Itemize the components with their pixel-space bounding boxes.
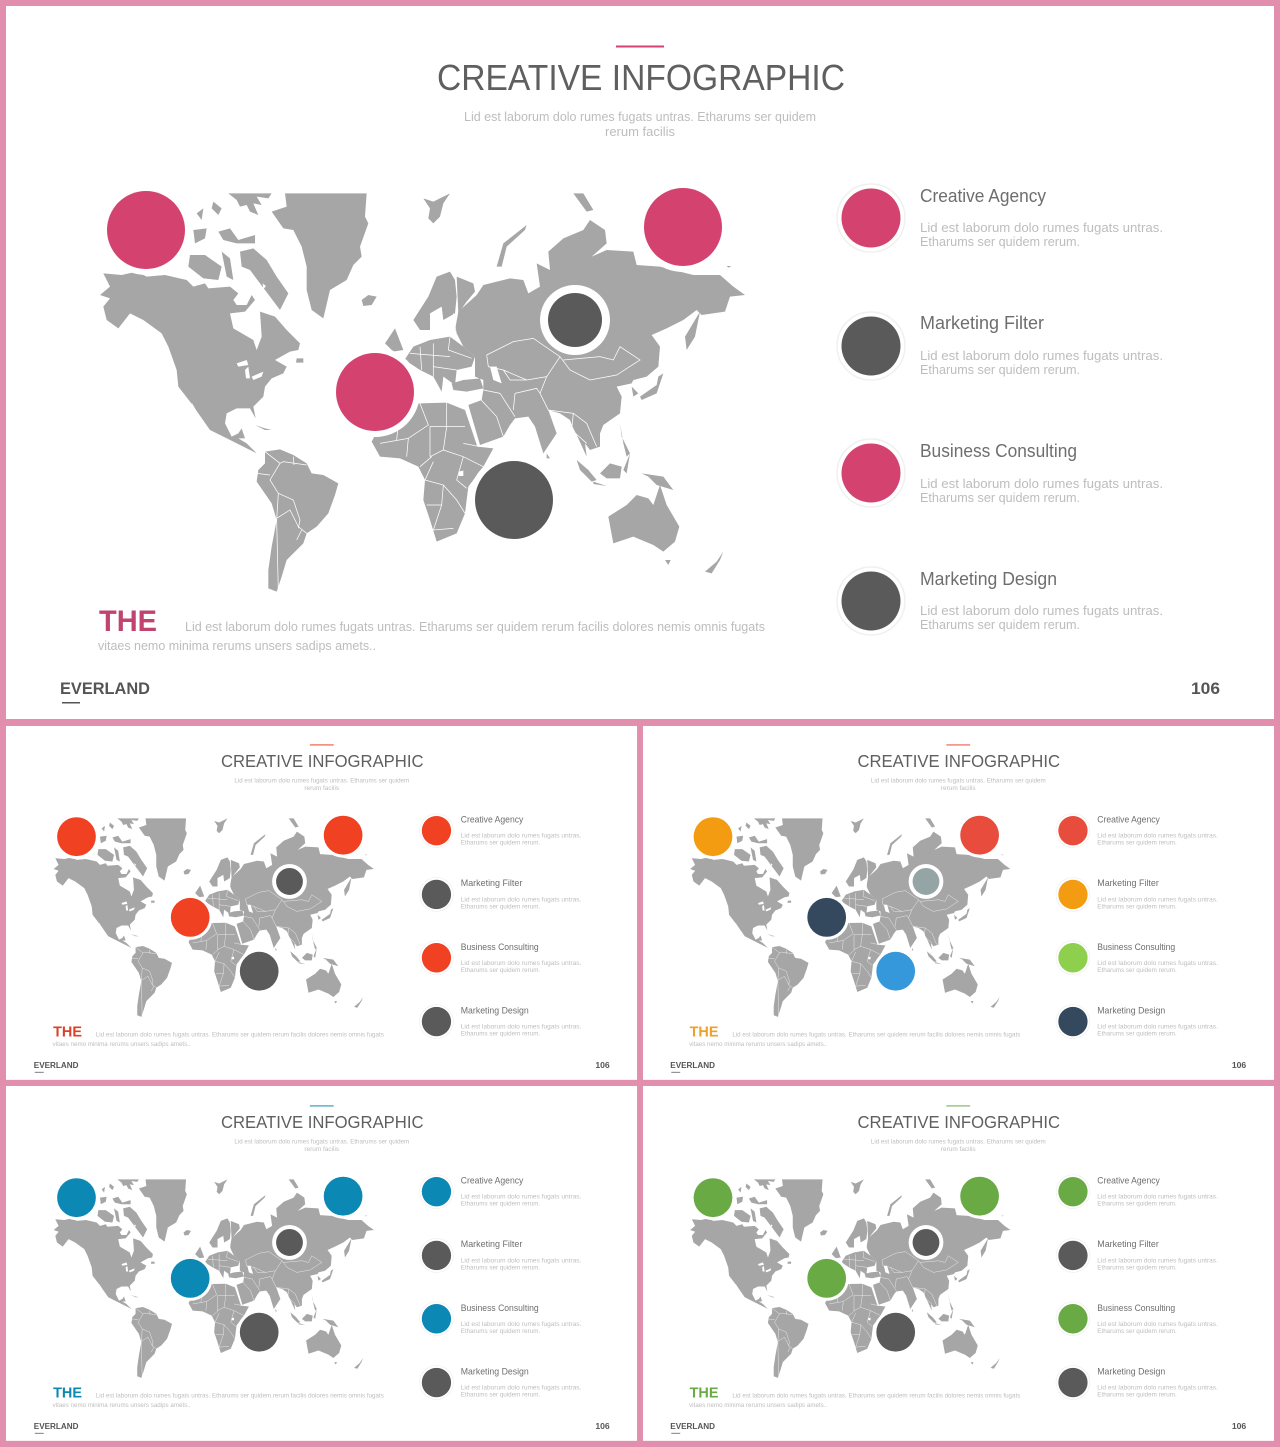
list item: marketing filter: Lid est laborum dolo rumes fugats untras. bbox=[920, 349, 1163, 363]
list item: business consulting: Lid est laborum dolo rumes fugats untras. bbox=[1097, 1321, 1218, 1328]
map marker: indian ocean bbox=[873, 1310, 918, 1355]
list item: business consulting bbox=[420, 1302, 582, 1336]
map marker: north america bbox=[691, 1175, 735, 1220]
subtitle: rerum facilis bbox=[941, 1146, 976, 1153]
subtitle bbox=[234, 777, 409, 792]
list item: creative agency: Lid est laborum dolo rumes fugats untras. bbox=[1097, 833, 1218, 840]
map marker: atlantic bbox=[168, 895, 213, 940]
list item: marketing filter: Marketing Filter bbox=[1097, 1239, 1159, 1249]
list item: business consulting: Lid est laborum dolo rumes fugats untras. bbox=[1097, 960, 1218, 967]
list item: business consulting bbox=[420, 941, 582, 975]
title: CREATIVE INFOGRAPHIC bbox=[857, 1112, 1060, 1132]
map marker: russia centre bbox=[272, 1225, 307, 1260]
map marker: north america bbox=[101, 185, 191, 275]
title: CREATIVE INFOGRAPHIC bbox=[221, 751, 424, 771]
list item: business consulting: Lid est laborum dolo rumes fugats untras. bbox=[920, 477, 1163, 491]
subtitle: Lid est laborum dolo rumes fugats untras. Etharums ser quidem bbox=[234, 777, 409, 784]
subtitle bbox=[871, 777, 1046, 792]
list item: marketing design: Etharums ser quidem rerum. bbox=[920, 618, 1080, 632]
map marker: russia east bbox=[321, 1174, 365, 1219]
world map bbox=[690, 818, 1010, 1017]
note: the bbox=[53, 1023, 384, 1048]
subtitle: Lid est laborum dolo rumes fugats untras. Etharums ser quidem bbox=[464, 110, 816, 124]
slide: green version bbox=[643, 1086, 1274, 1441]
list item: creative agency: Etharums ser quidem rerum. bbox=[461, 840, 540, 847]
map marker: north america bbox=[54, 1175, 99, 1220]
subtitle: Lid est laborum dolo rumes fugats untras. Etharums ser quidem bbox=[871, 1138, 1046, 1145]
note: the: vitaes nemo minima rerums unsers sadips amets.. bbox=[53, 1041, 191, 1048]
map marker: indian ocean bbox=[469, 455, 559, 545]
list item: marketing filter bbox=[420, 1239, 582, 1272]
map marker: north america bbox=[691, 814, 735, 859]
list item: marketing filter: Lid est laborum dolo rumes fugats untras. bbox=[1097, 1257, 1218, 1264]
list item: marketing design: Marketing Design bbox=[461, 1006, 529, 1016]
map marker: atlantic bbox=[330, 347, 420, 437]
map marker: indian ocean bbox=[237, 1310, 282, 1355]
list item: marketing design bbox=[837, 567, 1163, 635]
subtitle: Lid est laborum dolo rumes fugats untras. Etharums ser quidem bbox=[871, 777, 1046, 784]
map marker: russia centre bbox=[540, 285, 610, 355]
page number: 106 bbox=[595, 1060, 610, 1070]
list item: marketing design: Lid est laborum dolo rumes fugats untras. bbox=[1097, 1024, 1218, 1031]
list item: marketing design: Etharums ser quidem rerum. bbox=[461, 1391, 540, 1398]
list item: marketing design: Lid est laborum dolo rumes fugats untras. bbox=[920, 604, 1163, 618]
note: the bbox=[53, 1384, 384, 1409]
list item: marketing filter: Etharums ser quidem rerum. bbox=[461, 903, 540, 910]
map marker: russia centre bbox=[272, 864, 307, 899]
list item: business consulting: Business Consulting bbox=[920, 441, 1077, 461]
note: the: THE bbox=[690, 1023, 719, 1040]
list item: business consulting: Business Consulting bbox=[1097, 942, 1175, 952]
subtitle: rerum facilis bbox=[605, 125, 675, 139]
list item: creative agency: Creative Agency bbox=[461, 815, 524, 825]
list item: marketing design bbox=[420, 1005, 582, 1038]
subtitle bbox=[871, 1138, 1046, 1153]
list item: creative agency: Lid est laborum dolo rumes fugats untras. bbox=[461, 1194, 582, 1201]
list item: marketing design: Etharums ser quidem rerum. bbox=[461, 1030, 540, 1037]
footer brand: EVERLAND bbox=[34, 1421, 78, 1431]
list item: business consulting: Lid est laborum dolo rumes fugats untras. bbox=[461, 960, 582, 967]
map marker: indian ocean bbox=[237, 949, 282, 994]
page number: 106 bbox=[595, 1421, 610, 1431]
page number: 106 bbox=[1191, 679, 1220, 698]
list item: creative agency: Creative Agency bbox=[461, 1176, 524, 1186]
list item: marketing filter: Marketing Filter bbox=[920, 313, 1044, 333]
note: the: THE bbox=[690, 1384, 719, 1401]
list item: marketing filter: Lid est laborum dolo rumes fugats untras. bbox=[461, 896, 582, 903]
list item: marketing design: Lid est laborum dolo rumes fugats untras. bbox=[461, 1385, 582, 1392]
world map bbox=[690, 1179, 1010, 1378]
list item: marketing design: Marketing Design bbox=[461, 1367, 529, 1377]
list item: creative agency: Lid est laborum dolo rumes fugats untras. bbox=[1097, 1194, 1218, 1201]
list item: marketing design: Marketing Design bbox=[920, 569, 1057, 589]
list item: marketing filter: Lid est laborum dolo rumes fugats untras. bbox=[461, 1257, 582, 1264]
world map bbox=[100, 193, 745, 592]
list item: marketing filter: Etharums ser quidem rerum. bbox=[920, 363, 1080, 377]
map marker: atlantic bbox=[804, 895, 849, 940]
map marker: atlantic bbox=[168, 1256, 213, 1301]
list item: marketing design bbox=[1056, 1366, 1218, 1399]
note: the: Lid est laborum dolo rumes fugats untras. Etharums ser quidem rerum facilis dolores nemis omnis fugats bbox=[732, 1392, 1020, 1399]
subtitle bbox=[464, 110, 816, 139]
list item: marketing filter: Etharums ser quidem rerum. bbox=[461, 1264, 540, 1271]
list item: creative agency bbox=[837, 184, 1163, 252]
title: CREATIVE INFOGRAPHIC bbox=[857, 751, 1060, 771]
subtitle: rerum facilis bbox=[304, 785, 339, 792]
list item: business consulting: Etharums ser quidem rerum. bbox=[1097, 1328, 1177, 1335]
world map bbox=[54, 1179, 374, 1378]
list item: creative agency bbox=[420, 1175, 582, 1209]
slide: teal version bbox=[6, 1086, 637, 1441]
map marker: north america bbox=[54, 814, 99, 859]
note: the: THE bbox=[53, 1023, 82, 1040]
list item: business consulting: Lid est laborum dolo rumes fugats untras. bbox=[461, 1321, 582, 1328]
note: the: Lid est laborum dolo rumes fugats untras. Etharums ser quidem rerum facilis dolores nemis omnis fugats bbox=[185, 620, 765, 634]
footer brand: EVERLAND bbox=[670, 1060, 715, 1070]
note: the bbox=[689, 1023, 1020, 1048]
list item: marketing design: Etharums ser quidem rerum. bbox=[1097, 1030, 1177, 1037]
list item: marketing design: Lid est laborum dolo rumes fugats untras. bbox=[1097, 1385, 1218, 1392]
list item: creative agency bbox=[420, 814, 582, 848]
map marker: russia centre bbox=[909, 1225, 943, 1260]
list item: business consulting: Business Consulting bbox=[1097, 1303, 1175, 1313]
map marker: russia centre bbox=[909, 864, 943, 899]
footer brand: EVERLAND bbox=[34, 1060, 78, 1070]
list item: business consulting bbox=[837, 439, 1163, 507]
list item: creative agency: Creative Agency bbox=[1097, 1176, 1160, 1186]
map marker: russia east bbox=[957, 813, 1002, 858]
note: the: vitaes nemo minima rerums unsers sadips amets.. bbox=[98, 639, 376, 653]
list item: creative agency: Lid est laborum dolo rumes fugats untras. bbox=[461, 833, 582, 840]
list item: business consulting: Etharums ser quidem rerum. bbox=[461, 967, 540, 974]
note: the bbox=[98, 605, 765, 653]
list item: marketing filter bbox=[1056, 878, 1218, 911]
list item: marketing filter: Etharums ser quidem rerum. bbox=[1097, 1264, 1177, 1271]
map marker: russia east bbox=[957, 1174, 1002, 1219]
map marker: russia east bbox=[638, 182, 728, 272]
list item: creative agency: Creative Agency bbox=[920, 186, 1046, 206]
map marker: indian ocean bbox=[873, 949, 918, 994]
note: the: Lid est laborum dolo rumes fugats untras. Etharums ser quidem rerum facilis dolores nemis omnis fugats bbox=[96, 1392, 384, 1399]
subtitle: rerum facilis bbox=[304, 1146, 339, 1153]
list item: creative agency bbox=[1056, 1175, 1218, 1209]
title: CREATIVE INFOGRAPHIC bbox=[221, 1112, 424, 1132]
note: the: Lid est laborum dolo rumes fugats untras. Etharums ser quidem rerum facilis dolores nemis omnis fugats bbox=[732, 1031, 1020, 1038]
list item: marketing design bbox=[1056, 1005, 1218, 1038]
note: the: THE bbox=[99, 605, 157, 638]
list item: business consulting: Business Consulting bbox=[461, 942, 539, 952]
list item: marketing filter: Lid est laborum dolo rumes fugats untras. bbox=[1097, 896, 1218, 903]
subtitle: rerum facilis bbox=[941, 785, 976, 792]
footer brand: EVERLAND bbox=[60, 679, 150, 698]
slide: red version bbox=[6, 726, 637, 1080]
note: the bbox=[689, 1384, 1020, 1409]
list item: marketing filter: Marketing Filter bbox=[1097, 878, 1159, 888]
list item: marketing design: Etharums ser quidem rerum. bbox=[1097, 1391, 1177, 1398]
list item: marketing design: Marketing Design bbox=[1097, 1006, 1165, 1016]
page number: 106 bbox=[1232, 1421, 1247, 1431]
subtitle bbox=[234, 1138, 409, 1153]
subtitle: Lid est laborum dolo rumes fugats untras. Etharums ser quidem bbox=[234, 1138, 409, 1145]
list item: marketing filter: Etharums ser quidem rerum. bbox=[1097, 903, 1177, 910]
footer brand: EVERLAND bbox=[670, 1421, 715, 1431]
list item: creative agency: Etharums ser quidem rerum. bbox=[1097, 1201, 1177, 1208]
list item: creative agency: Creative Agency bbox=[1097, 815, 1160, 825]
list item: marketing design: Marketing Design bbox=[1097, 1367, 1165, 1377]
list item: creative agency bbox=[1056, 814, 1218, 848]
title: CREATIVE INFOGRAPHIC bbox=[437, 57, 845, 98]
note: the: Lid est laborum dolo rumes fugats untras. Etharums ser quidem rerum facilis dolores nemis omnis fugats bbox=[96, 1031, 384, 1038]
page number: 106 bbox=[1232, 1060, 1247, 1070]
list item: business consulting bbox=[1056, 1302, 1218, 1336]
list item: business consulting bbox=[1056, 941, 1218, 975]
list item: marketing design bbox=[420, 1366, 582, 1399]
list item: marketing filter bbox=[837, 312, 1163, 380]
note: the: THE bbox=[53, 1384, 82, 1401]
list item: marketing filter bbox=[1056, 1239, 1218, 1272]
list item: creative agency: Lid est laborum dolo rumes fugats untras. bbox=[920, 221, 1163, 235]
list item: marketing filter: Marketing Filter bbox=[461, 878, 522, 888]
slide: multicolour version bbox=[643, 726, 1274, 1080]
note: the: vitaes nemo minima rerums unsers sadips amets.. bbox=[53, 1402, 191, 1409]
list item: marketing filter bbox=[420, 878, 582, 911]
note: the: vitaes nemo minima rerums unsers sadips amets.. bbox=[689, 1041, 827, 1048]
world map bbox=[54, 818, 374, 1017]
note: the: vitaes nemo minima rerums unsers sadips amets.. bbox=[689, 1402, 827, 1409]
list item: marketing filter: Marketing Filter bbox=[461, 1239, 522, 1249]
list item: business consulting: Etharums ser quidem rerum. bbox=[920, 491, 1080, 505]
map marker: atlantic bbox=[804, 1256, 849, 1301]
slide: large pink version bbox=[6, 6, 1274, 719]
list item: business consulting: Etharums ser quidem rerum. bbox=[461, 1328, 540, 1335]
list item: marketing design: Lid est laborum dolo rumes fugats untras. bbox=[461, 1024, 582, 1031]
list item: business consulting: Etharums ser quidem rerum. bbox=[1097, 967, 1177, 974]
list item: creative agency: Etharums ser quidem rerum. bbox=[1097, 840, 1177, 847]
map marker: russia east bbox=[321, 813, 365, 858]
list item: creative agency: Etharums ser quidem rerum. bbox=[461, 1201, 540, 1208]
list item: business consulting: Business Consulting bbox=[461, 1303, 539, 1313]
list item: creative agency: Etharums ser quidem rerum. bbox=[920, 235, 1080, 249]
